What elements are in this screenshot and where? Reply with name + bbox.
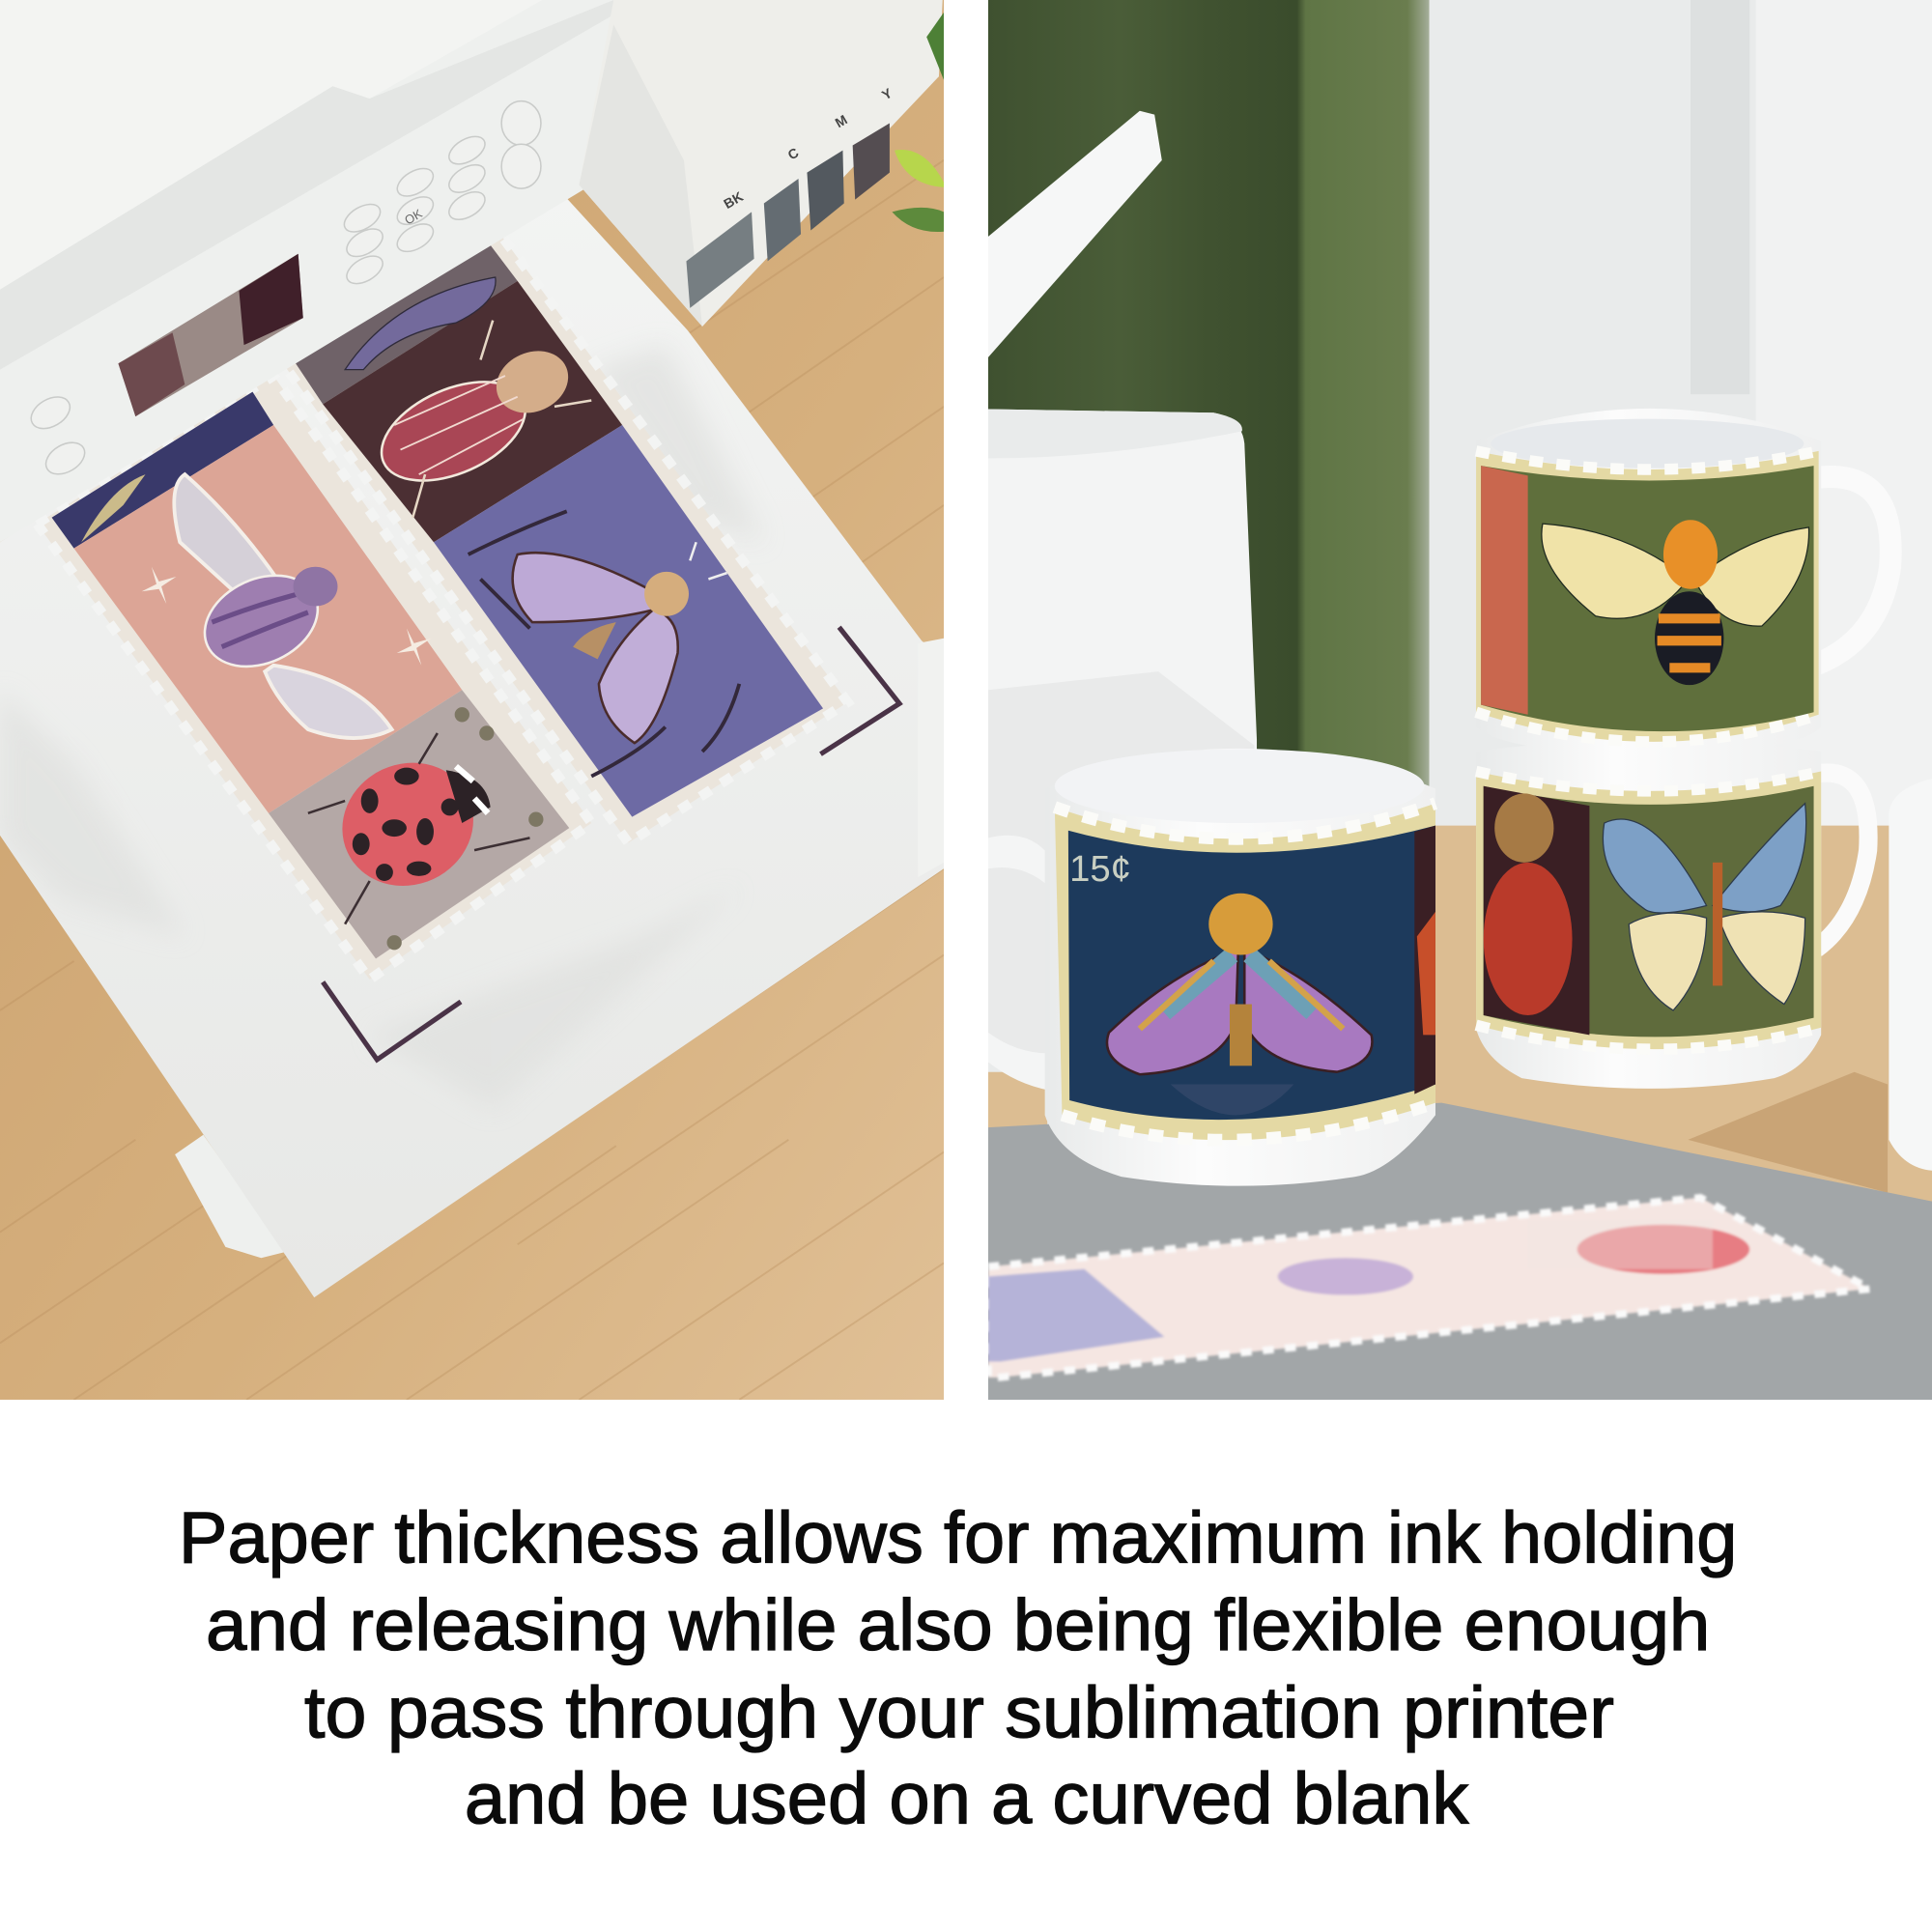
caption: Paper thickness allows for maximum ink holding bbox=[179, 1496, 1737, 1577]
top mug handle bbox=[1814, 477, 1890, 666]
mug handle bbox=[988, 836, 1050, 1091]
photo: printer with stamp print bbox=[0, 0, 944, 1400]
printer display bbox=[118, 254, 303, 416]
caption bbox=[179, 1496, 1737, 1839]
lid bbox=[988, 111, 1162, 357]
paper support edge bbox=[923, 638, 944, 659]
large white mug bbox=[988, 410, 1257, 838]
caption: to pass through your sublimation printer bbox=[304, 1671, 1614, 1752]
pink beetle bbox=[142, 474, 431, 738]
green curtain bbox=[988, 0, 1430, 838]
right stamp strip with border bbox=[278, 224, 848, 842]
ink labels: BK bbox=[721, 188, 746, 212]
red beetle bbox=[367, 321, 591, 518]
table bbox=[988, 826, 1932, 1233]
grey mat bbox=[988, 1103, 1932, 1400]
paper sheet bbox=[0, 185, 944, 1297]
far right mug bbox=[1889, 825, 1932, 1171]
crop marks bbox=[323, 627, 899, 1060]
top mug bbox=[1476, 409, 1821, 757]
lower mug handle bbox=[1816, 773, 1868, 949]
ink labels: M bbox=[833, 112, 850, 130]
front mug bbox=[988, 749, 1435, 1186]
sheer curtain bbox=[1430, 0, 1749, 786]
transfer paper bbox=[988, 1198, 1870, 1378]
ink labels bbox=[721, 85, 895, 212]
ink labels: C bbox=[785, 145, 801, 163]
keypad bbox=[26, 101, 541, 480]
left stamp strip with border bbox=[37, 376, 591, 980]
caption: and releasing while also being flexible enough bbox=[206, 1584, 1710, 1665]
leaf shadow on paper bbox=[0, 345, 764, 1109]
ink tank bbox=[579, 0, 943, 327]
ink labels: Y bbox=[879, 85, 895, 103]
photo: stamp mugs bbox=[988, 0, 1932, 1400]
purple moth bbox=[513, 542, 727, 743]
stacked mugs bbox=[1476, 409, 1890, 1089]
lower mug bbox=[1476, 739, 1821, 1089]
printer body bbox=[0, 0, 616, 542]
ladybug bbox=[308, 707, 543, 950]
leaf bbox=[892, 13, 944, 232]
paper tray tab bbox=[175, 1135, 286, 1258]
price label: 15¢ bbox=[1069, 848, 1131, 890]
caption: and be used on a curved blank bbox=[465, 1758, 1469, 1839]
keypad OK label: OK bbox=[402, 206, 425, 227]
